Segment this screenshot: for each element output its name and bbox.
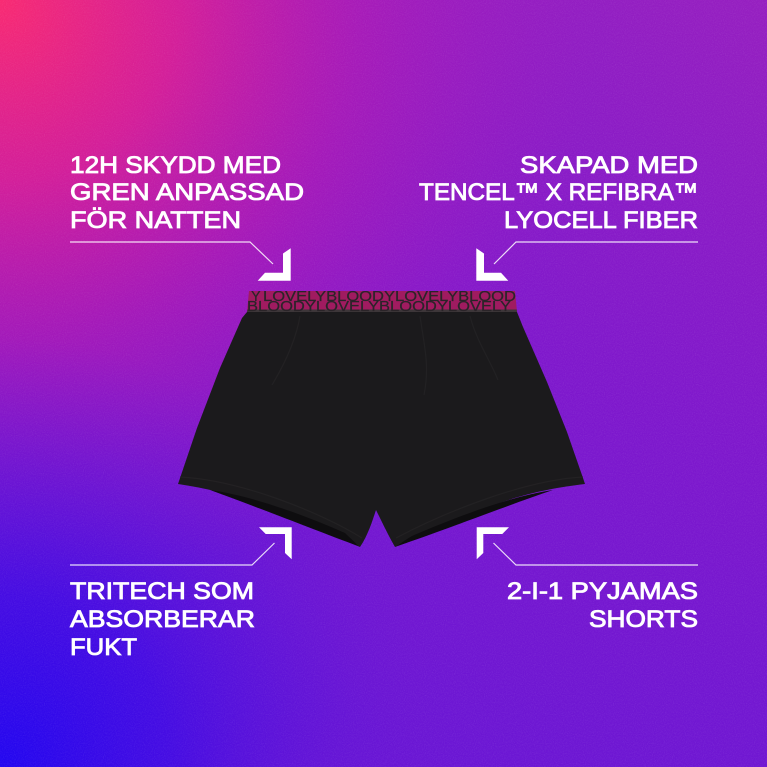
inner lining at left hem [210,490,358,546]
inner lining at right hem [397,490,553,546]
leader line: top left [70,242,273,264]
text: Tencel fibre: LYOCELL FIBER [504,207,698,234]
text: Tencel fibre: SKAPAD MED [520,152,698,179]
text: Tencel fibre: TENCEL™ X REFIBRA™ [419,179,698,206]
fabric folds [180,316,583,538]
product: black shorts [178,289,585,547]
callout: top left [70,152,304,281]
waistband with repeating logo text: Y [251,289,261,305]
shorts body [178,312,585,547]
text: 12h protection [70,152,304,234]
text: Tritech [70,578,255,661]
text: 2-in-1 pyjama shorts: 2-I-1 PYJAMAS [507,578,698,605]
leader line: top right [494,242,698,264]
callout: top right [419,152,698,281]
waistband with repeating logo text: LOVELYBLOODYLOVELYBLOODY [263,289,527,305]
text: Tencel fibre [419,152,698,234]
waistband with repeating logo text [247,291,517,312]
icon: corner arrow top left [258,248,291,281]
text: 2-in-1 pyjama shorts: SHORTS [589,606,698,633]
icon: corner arrow top right [476,248,508,281]
callout: bottom left [70,527,292,661]
text: 12h protection: 12H SKYDD MED [70,152,281,179]
text: 12h protection: GREN ANPASSAD [70,179,304,206]
text: 12h protection: FÖR NATTEN [70,207,241,234]
text: Tritech: ABSORBERAR [70,606,255,633]
text: 2-in-1 pyjama shorts [507,578,698,633]
text: Tritech: TRITECH SOM [70,578,254,605]
leader line: bottom right [494,543,698,565]
icon: corner arrow bottom left [259,527,292,559]
icon: corner arrow bottom right [477,527,509,559]
text: Tritech: FUKT [70,634,137,661]
callout: bottom right [477,527,698,633]
leader line: bottom left [70,543,274,565]
waistband with repeating logo text: BLOODYLOVELYBLOODYLOVELY [247,299,511,315]
